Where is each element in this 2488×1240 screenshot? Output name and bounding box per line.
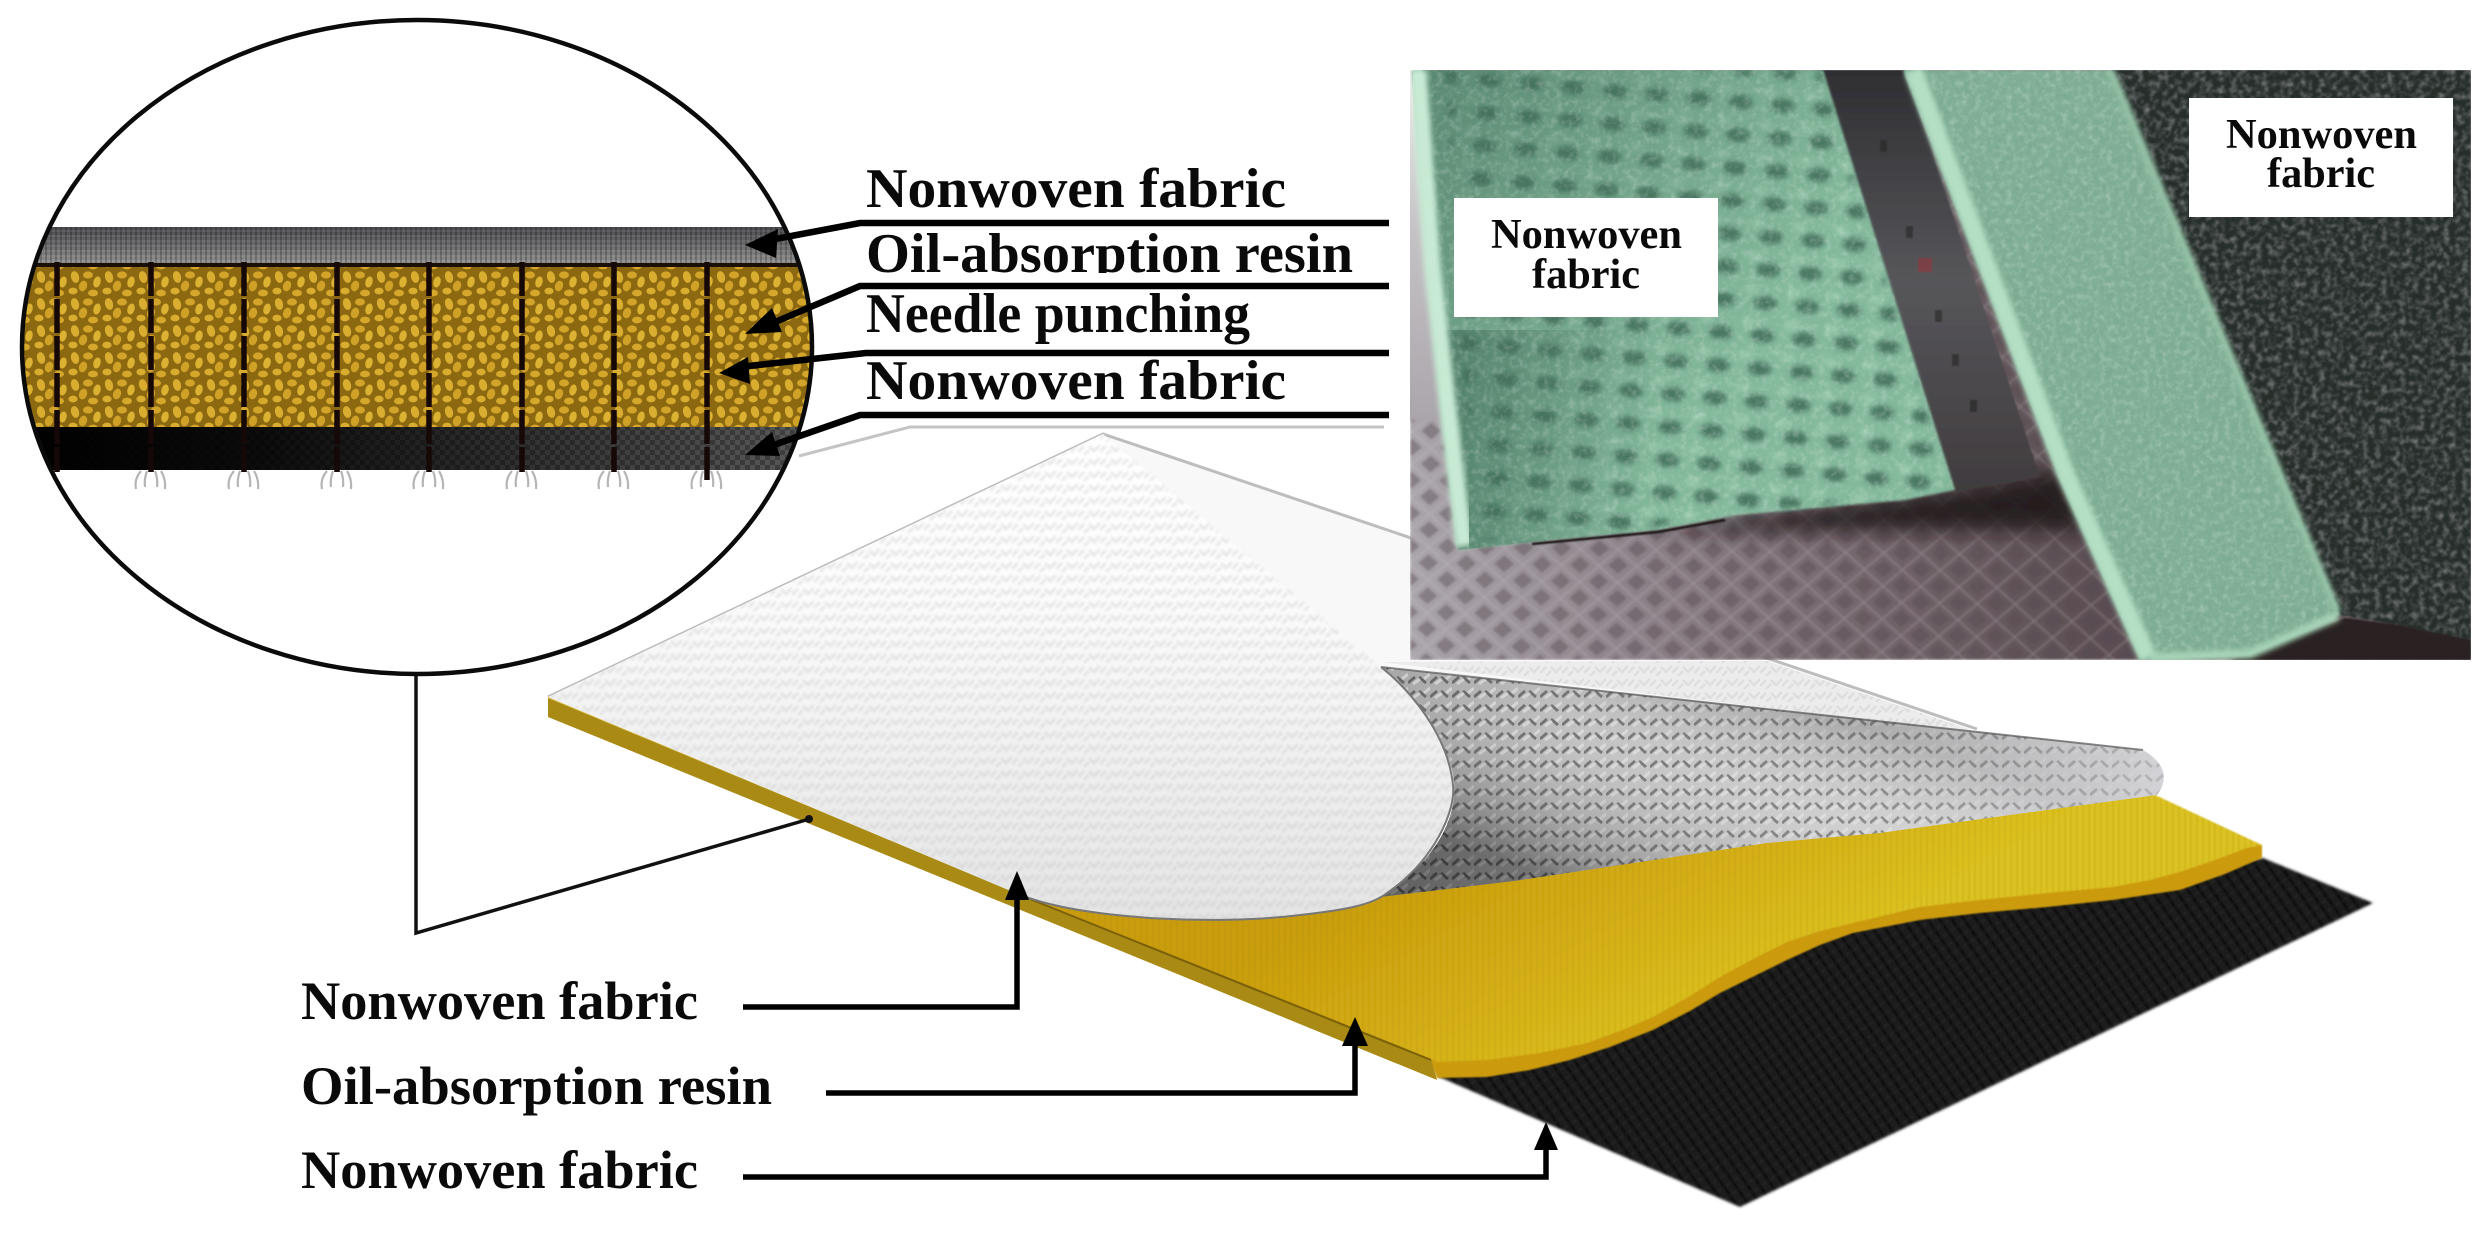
lower label: Nonwoven fabric (bottom): Nonwoven fabric: [301, 1140, 698, 1200]
circle outline: [22, 20, 812, 674]
upper label: Nonwoven fabric: Nonwoven fabric: [866, 158, 1286, 220]
side edge of the composite sheet: [548, 697, 1437, 1080]
arrow to resin layer: [826, 1017, 1368, 1093]
lower label: Oil-absorption resin: [301, 1017, 1368, 1116]
lower label: Nonwoven fabric (top face): Nonwoven fabric: [301, 971, 698, 1031]
photo label right: [2189, 98, 2453, 217]
upper label: Oil-absorption resin: [745, 223, 1389, 334]
lower label: Oil-absorption resin: Oil-absorption resin: [301, 1056, 772, 1116]
upper label: Nonwoven fabric lower: [745, 350, 1389, 456]
upper label: Nonwoven fabric: [745, 158, 1389, 258]
upper label: Needle punching: Needle punching: [866, 283, 1250, 345]
photo: green felt strip, right: [1903, 70, 2340, 660]
bottom nonwoven band: [20, 427, 820, 470]
photo label left: Nonwoven: [1491, 212, 1682, 258]
arrow to needle thread: [719, 353, 1389, 384]
photo: pink-grey backing: [1405, 70, 2471, 660]
photo label right: Nonwoven: [2226, 112, 2417, 158]
magnified cross-section circle: [20, 20, 820, 933]
arrow to top band: [745, 223, 1389, 258]
resin band: [20, 263, 820, 427]
cross-section layers: [20, 227, 820, 489]
photo label right: fabric: [2267, 151, 2375, 197]
photo: green felt with needle-punched dimples, left: [1412, 70, 1955, 550]
grey callout line to sheet corner: [799, 427, 1384, 456]
lower label: Nonwoven fabric (top face): [301, 871, 1029, 1031]
upper label: Nonwoven fabric lower: Nonwoven fabric: [866, 350, 1286, 412]
needle punching threads: [57, 262, 707, 480]
white top nonwoven face: [548, 434, 1453, 920]
arrow to white face: [743, 871, 1029, 1007]
arrow to black layer: [743, 1122, 1558, 1177]
grey underside of the peeled nonwoven fabric: [1380, 667, 2164, 897]
top nonwoven band: [20, 227, 820, 263]
yellow oil-absorption resin layer: [1026, 794, 2262, 1078]
photo of the real fabric sample: [1405, 70, 2471, 660]
arrow to bottom band: [745, 415, 1389, 456]
bottom black nonwoven layer: [1437, 858, 2373, 1207]
layered sheet illustration: [548, 434, 2373, 1207]
photo label left: fabric: [1532, 252, 1640, 298]
photo label left: [1454, 198, 1718, 317]
callout leader from sheet to circle: [416, 672, 813, 933]
lower label: Nonwoven fabric (bottom): [301, 1122, 1558, 1200]
thread loops: [136, 471, 721, 489]
photo: dark nonwoven fabric: [2111, 70, 2471, 660]
photo: steel ruler: [1820, 70, 2040, 492]
upper label: Needle punching: [719, 283, 1389, 384]
upper label: Oil-absorption resin: Oil-absorption resin: [866, 223, 1353, 285]
rear part of white sheet: [548, 434, 1977, 732]
arrow to resin band: [745, 286, 1389, 334]
circle fill: [23, 21, 811, 673]
